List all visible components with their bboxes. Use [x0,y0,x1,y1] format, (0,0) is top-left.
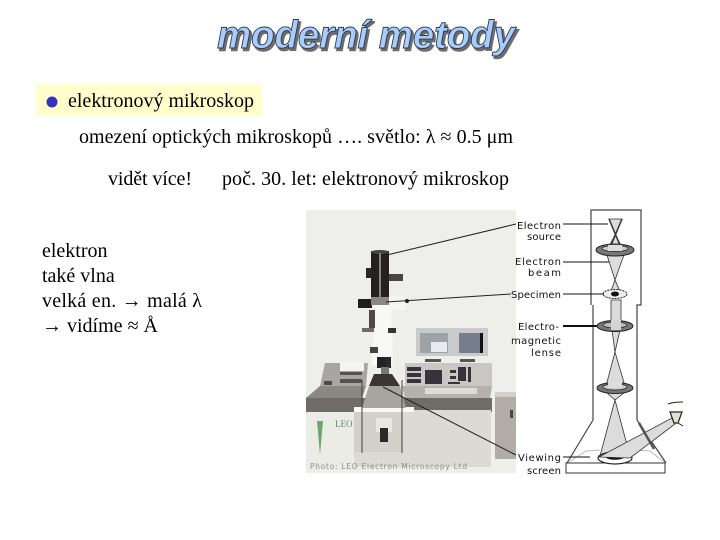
photo: electron microscope: LEO [335,419,353,429]
source V [609,219,622,250]
lens 1 [596,244,634,256]
observer eye [668,402,683,426]
column outline [567,210,666,463]
text block: electron is also a wave: → vidíme ≈ Å [42,315,159,337]
text block: electron is also a wave [42,240,202,337]
label: Electron source [517,221,561,243]
label: Electron source: Electron [517,221,561,232]
label: Viewing screen: screen [527,466,561,477]
label: Electromagnetic lense: magnetic [511,336,561,347]
text block: electron is also a wave: také vlna [42,265,115,287]
text: 1930s electron microscope: poč. 30. let: elektronový mikroskop [222,168,509,190]
viewing screen [598,452,632,464]
label: Electromagnetic lense: Electro- [518,322,559,333]
text block: electron is also a wave: elektron [42,240,108,262]
electron microscope schematic [566,210,683,473]
chamber shelf [569,450,664,462]
label: Viewing screen: Viewing [518,453,561,464]
pointer lines from labels to photo [383,224,516,455]
leader lines [563,224,609,457]
label: Electromagnetic lense: lense [531,348,561,359]
label: Electromagnetic lense [511,322,561,359]
title: moderní metody [217,14,517,57]
label: Electron beam: beam [528,268,561,279]
beam [600,219,630,456]
lens 2 [597,320,633,332]
cabinet lines [362,380,402,453]
column black top [371,251,389,297]
photo: electron microscope [306,210,516,473]
LEO logo and green wedge [317,421,323,455]
text block: electron is also a wave: velká en. → malá λ [42,290,202,312]
right cabinet [495,392,516,459]
text: see more: vidět více! [108,168,192,190]
right console panel [405,363,492,389]
highlighted bullet: elektronový mikroskop: elektronový mikroskop [68,90,254,112]
label: Electron beam: Electron [515,257,561,268]
viewing window beam [599,418,675,458]
label: Electron source: source [527,232,561,243]
eyepieces [377,357,385,368]
label: Specimen: Specimen [511,290,561,301]
photo credit: Photo: LEO Electron Microscopy Ltd [310,462,467,471]
column white body [372,300,393,365]
window [639,423,654,449]
desk top [306,386,366,398]
specimen holder [603,290,627,298]
lens 3 [597,382,633,394]
left console panel [320,363,368,386]
highlighted bullet: elektronový mikroskop [36,84,262,116]
monitors [416,328,488,356]
text: optical microscope limits: omezení optických mikroskopů …. světlo: λ ≈ 0.5 μm [79,126,513,148]
central console wedge [362,386,406,408]
lower lens [376,418,392,432]
label: Viewing screen [518,453,561,477]
base [566,463,665,473]
label: Electron beam [515,257,561,279]
title: moderní metody [219,16,519,60]
cabinet body [354,410,491,467]
